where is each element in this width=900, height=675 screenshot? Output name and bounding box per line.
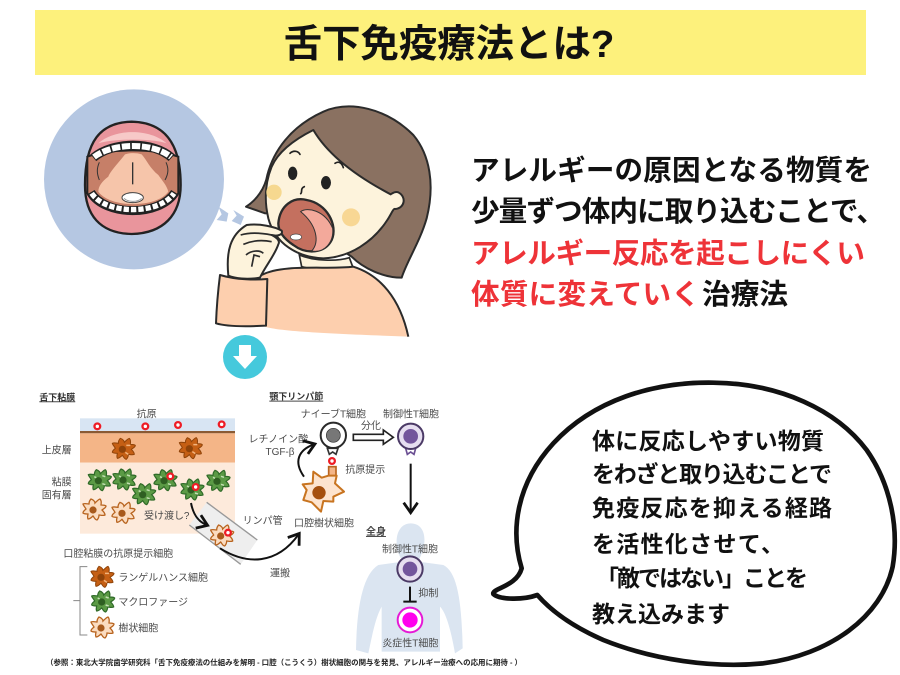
hand-off label and arrow xyxy=(144,503,207,525)
naive T cell xyxy=(301,407,366,454)
lymph duct transport arrow: リンパ管 xyxy=(243,514,283,527)
lymph duct transport arrow xyxy=(220,514,299,580)
heading: sublingual mucosa: 舌下粘膜 xyxy=(39,391,75,402)
main explanation text: 治療法 xyxy=(702,279,788,311)
main explanation text: 体質に変えていく xyxy=(471,279,700,311)
layer labels xyxy=(42,408,157,502)
illustration: woman with sublingual tablet xyxy=(44,89,431,337)
hand holding tablet xyxy=(228,225,282,279)
layer labels: 上皮層 xyxy=(42,443,72,456)
naive T cell: ナイーブT細胞 xyxy=(301,407,366,420)
layer labels: 固有層 xyxy=(42,489,72,502)
differentiation arrow xyxy=(353,420,393,444)
lymph duct transport arrow: 運搬 xyxy=(270,567,290,580)
source citation: （参照：東北大学院歯学研究科「舌下免疫療法の仕組みを解明 - 口腔（こうくう）樹状細胞の関与を発見、アレルギー治療への応用に期待 - ） xyxy=(46,657,522,667)
oral dendritic cell presenting antigen: 抗原提示 xyxy=(345,463,385,476)
hair xyxy=(246,107,431,278)
regulatory T cell: 制御性T細胞 xyxy=(383,407,439,420)
title banner: 舌下免疫療法とは? xyxy=(284,23,614,66)
whole body silhouette with T cells: 炎症性T細胞 xyxy=(382,637,438,650)
title banner xyxy=(35,10,866,75)
icon: pointer chevrons xyxy=(217,207,244,225)
main explanation text: 少量ずつ体内に取り込むことで、 xyxy=(471,196,885,228)
heading: submandibular lymph node: 顎下リンパ節 xyxy=(269,391,323,402)
retinoic acid label and arrow: TGF-β xyxy=(265,447,295,458)
speech bubble callout: を活性化させて、 xyxy=(592,531,784,557)
lymph vessel with migrating cell xyxy=(189,502,257,564)
speech bubble callout: 「敵ではない」ことを xyxy=(596,565,808,591)
arrow to whole body xyxy=(408,464,414,512)
layer labels: 粘膜 xyxy=(52,475,72,488)
legend: antigen presenting cells: 樹状細胞 xyxy=(118,622,158,635)
face xyxy=(266,130,404,258)
open mouth xyxy=(278,199,334,251)
layer labels: 抗原 xyxy=(137,408,157,421)
legend: antigen presenting cells: 口腔粘膜の抗原提示細胞 xyxy=(63,547,173,560)
legend: antigen presenting cells xyxy=(63,547,208,638)
whole body silhouette with T cells: 制御性T細胞 xyxy=(382,542,438,555)
hand-off label and arrow: 受け渡し? xyxy=(144,510,190,522)
regulatory T cell xyxy=(383,407,439,454)
antigen presenting cells in tissue xyxy=(83,438,230,523)
icon: magnified mouth circle xyxy=(44,89,224,269)
tissue layers xyxy=(80,418,235,534)
oral dendritic cell presenting antigen xyxy=(294,457,385,529)
neck xyxy=(299,255,353,269)
main explanation text: アレルギーの原因となる物質を xyxy=(471,155,872,187)
eyes, brows, nose and cheeks xyxy=(266,151,360,226)
panel: sublingual mucosa diagram xyxy=(39,391,257,638)
differentiation arrow: 分化 xyxy=(361,420,381,432)
whole body silhouette with T cells: 全身 xyxy=(366,525,386,538)
retinoic acid label and arrow xyxy=(249,432,314,477)
speech bubble callout: 教え込みます xyxy=(592,601,730,627)
speech bubble callout: 体に反応しやすい物質 xyxy=(592,428,824,454)
whole body silhouette with T cells: 抑制 xyxy=(418,587,438,600)
speech bubble callout: 免疫反応を抑える経路 xyxy=(592,495,832,521)
legend: antigen presenting cells: ランゲルハンス細胞 xyxy=(118,571,208,584)
panel: submandibular lymph node and whole body diagram xyxy=(220,391,463,653)
main explanation text xyxy=(471,155,885,311)
main explanation text: アレルギー反応を起こしにくい xyxy=(471,238,865,270)
whole body silhouette with T cells xyxy=(356,523,463,653)
icon: down arrow in teal circle xyxy=(223,335,267,379)
speech bubble callout xyxy=(493,383,895,665)
retinoic acid label and arrow: レチノイン酸 xyxy=(249,432,308,445)
speech bubble callout: をわざと取り込むことで xyxy=(592,461,832,487)
oral dendritic cell presenting antigen: 口腔樹状細胞 xyxy=(294,516,354,529)
sweater xyxy=(216,267,408,337)
surface antigens xyxy=(93,420,226,430)
legend: antigen presenting cells: マクロファージ xyxy=(118,597,188,609)
